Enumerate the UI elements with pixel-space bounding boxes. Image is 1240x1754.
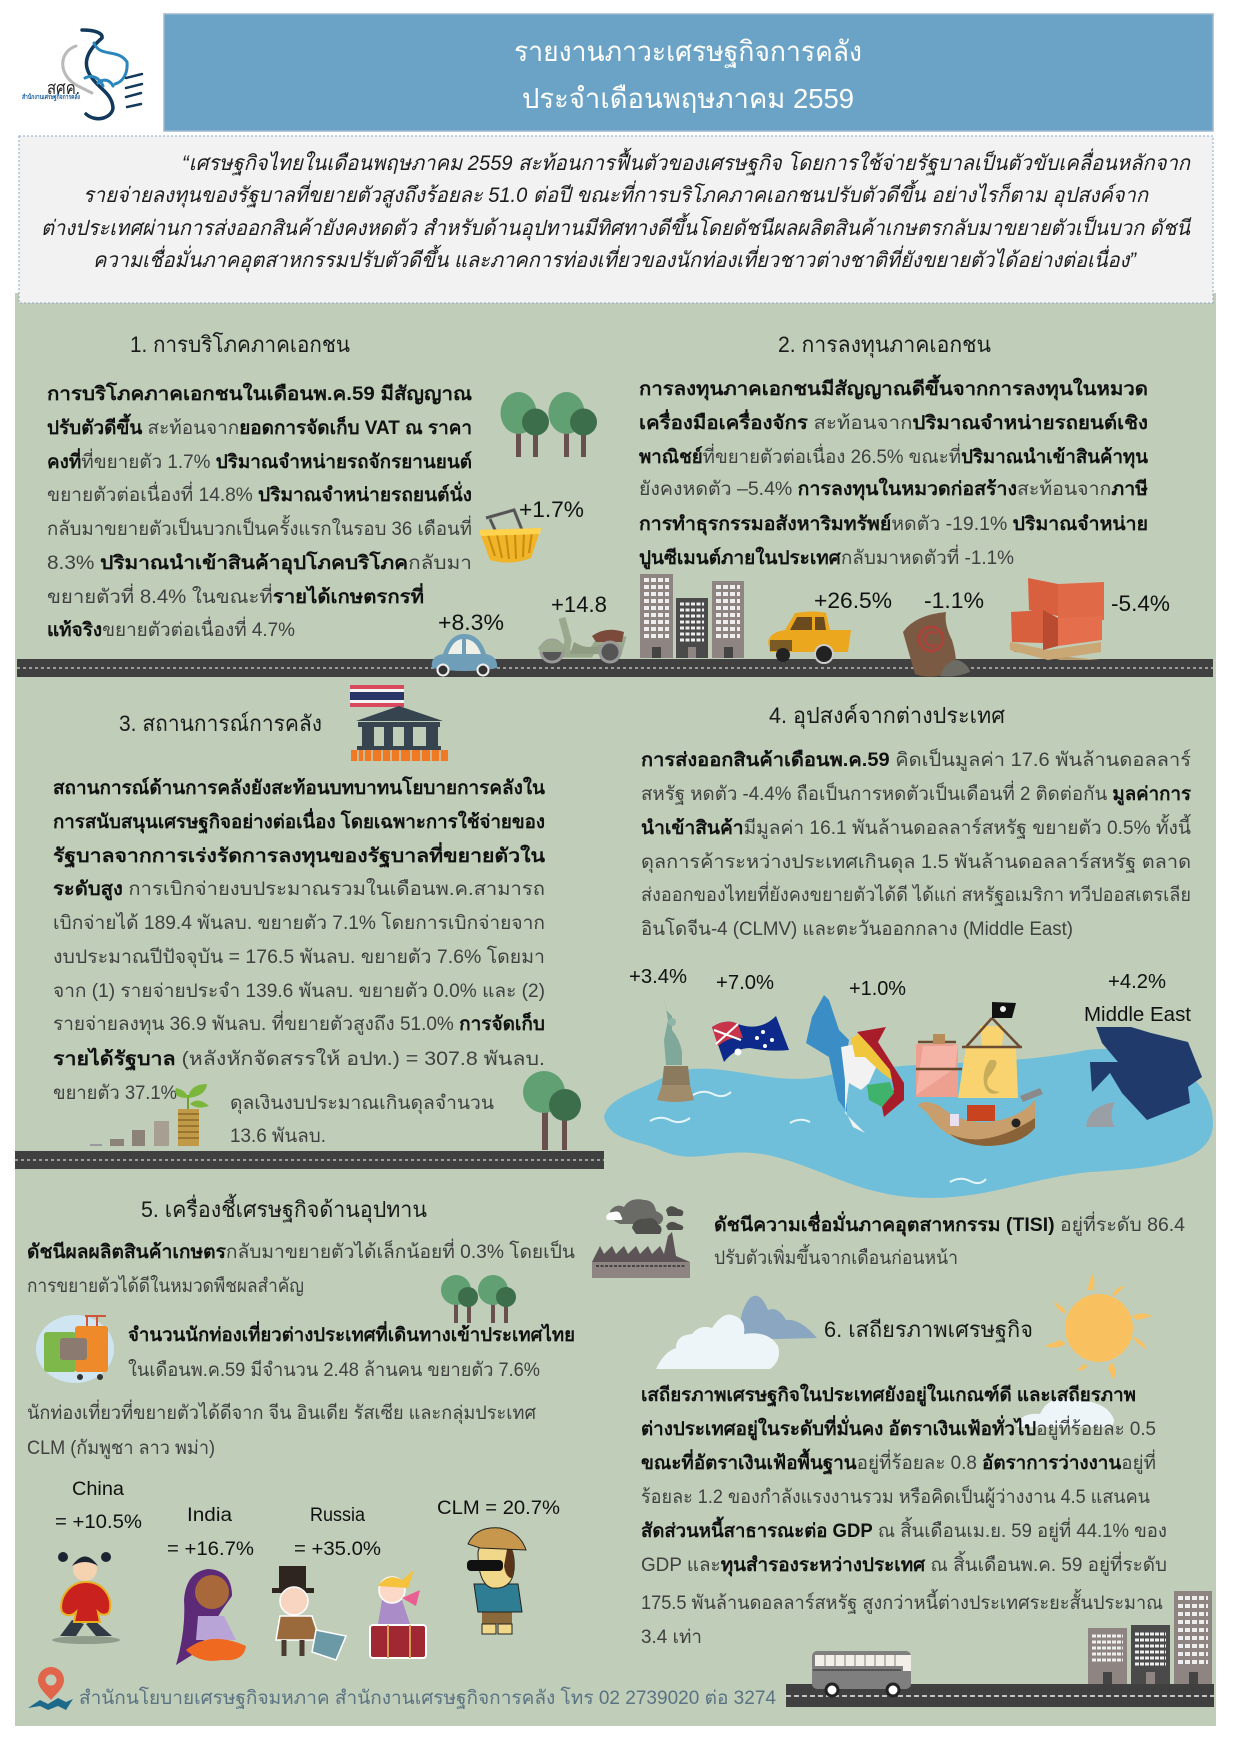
label: Middle East [1084, 1004, 1191, 1026]
section 5 text: tourists [27, 1321, 575, 1459]
icon: luggage [36, 1315, 114, 1383]
icon: trees [441, 1275, 516, 1323]
section 5 text: agriculture: ดัชนีผลผลิตสินค้าเกษตรกลับมาขยายตัวได้เล็กน้อยที่ 0.3% โดยเป็น [27, 1238, 575, 1263]
icon: buildings [640, 574, 744, 658]
icon: shopping basket [479, 510, 541, 563]
label: India [167, 1505, 254, 1560]
icon: clouds [656, 1296, 817, 1369]
section 2 text [639, 374, 1148, 570]
label: Russia: Russia [310, 1505, 365, 1526]
section 4 text: ส่งออกของไทยที่ยังคงขยายตัวได้ดี ได้แก่ สหรัฐอเมริกา ทวีปออสเตรเลีย [641, 881, 1191, 906]
icon: statue of liberty [657, 997, 694, 1102]
section 4 text: การส่งออกสินค้าเดือนพ.ค.59 คิดเป็นมูลค่า 17.6 พันล้านดอลลาร์ [641, 747, 1191, 771]
section 2 text: พาณิชย์ที่ขยายตัวต่อเนื่อง 26.5% ขณะที่ปริมาณนำเข้าสินค้าทุน [639, 443, 1148, 469]
budget balance text [230, 1093, 494, 1147]
section 3 text: จาก (1) รายจ่ายประจำ 139.6 พันลบ. ขยายตัว 0.0% และ (2) [53, 981, 545, 1002]
section 4 text: สหรัฐ หดตัว -4.4% ถือเป็นการหดตัวเป็นเดือนที่ 2 ติดต่อกัน มูลค่าการ [641, 780, 1192, 806]
label: +1.7% [519, 497, 584, 522]
section 6 text: ต่างประเทศอยู่ในระดับที่มั่นคง อัตราเงินเฟ้อทั่วไปอยู่ที่ร้อยละ 0.5 [641, 1415, 1156, 1441]
label: India: India [187, 1505, 232, 1526]
section: TISI text [714, 1211, 1185, 1269]
icon: location pin and map [28, 1667, 73, 1710]
section 2 text: เครื่องมือเครื่องจักร สะท้อนจาก ปริมาณจำหน่ายรถยนต์เชิง [639, 409, 1148, 434]
label: -5.4% [1111, 591, 1170, 616]
road: bottom [786, 1684, 1214, 1707]
label: India: = +16.7% [167, 1539, 254, 1560]
section 1 text: ขยายตัวที่ 8.4% ในขณะที่ รายได้เกษตรกรที่ [47, 583, 424, 608]
section: TISI text: ปรับตัวเพิ่มขึ้นจากเดือนก่อนหน้า [714, 1244, 958, 1269]
section 6 text [641, 1383, 1167, 1648]
icon: Russian boy [272, 1566, 346, 1660]
label: China: = +10.5% [55, 1512, 142, 1533]
section 3 text [53, 776, 545, 1104]
section 2 text: ยังคงหดตัว –5.4% การลงทุนในหมวดก่อสร้าง สะท้อนจากภาษี [639, 477, 1148, 501]
icon: CLM tourist [467, 1528, 526, 1634]
section 1 text: คงที่ที่ขยายตัว 1.7% ปริมาณจำหน่ายรถจักรยานยนต์ [47, 448, 472, 473]
road: top [17, 659, 1213, 677]
section 4 text: ดุลการค้าระหว่างประเทศเกินดุล 1.5 พันล้านดอลลาร์สหรัฐ ตลาด [641, 851, 1191, 874]
section 6 text: 175.5 พันล้านดอลลาร์สหรัฐ สูงกว่าหนี้ต่างประเทศระยะสั้นประมาณ [641, 1589, 1163, 1614]
title [514, 36, 862, 114]
section 1 text: การบริโภคภาคเอกชนในเดือนพ.ค.59 มีสัญญาณ [47, 382, 472, 405]
logo: สำนักงานเศรษฐกิจการคลัง [22, 93, 80, 102]
icon: Russian girl [370, 1570, 426, 1658]
icon: trees [500, 392, 597, 457]
section 5 text: tourists: CLM (กัมพูชา ลาว พม่า) [27, 1438, 215, 1459]
label: +14.8 [551, 592, 607, 617]
section 5 text: tourists: ในเดือนพ.ค.59 มีจำนวน 2.48 ล้านคน ขยายตัว 7.6% [128, 1359, 540, 1381]
section 4 text: อินโดจีน-4 (CLMV) และตะวันออกกลาง (Middle East) [641, 917, 1073, 940]
section 2 heading: 2. การลงทุนภาคเอกชน [778, 332, 991, 358]
section 1 text: ปรับตัวดีขึ้น สะท้อนจากยอดการจัดเก็บ VAT ณ ราคา [47, 413, 472, 439]
section 3 text: ระดับสูง การเบิกจ่ายงบประมาณรวมในเดือนพ.ค.สามารถ [53, 878, 545, 901]
section 6 text: ขณะที่อัตราเงินเฟ้อพื้นฐานอยู่ที่ร้อยละ 0.8 อัตราการว่างงานอยู่ที่ [641, 1448, 1156, 1476]
section 1 heading: 1. การบริโภคภาคเอกชน [130, 332, 350, 357]
section 2 text: การลงทุนภาคเอกชนมีสัญญาณดีขึ้นจากการลงทุนในหมวด [639, 374, 1148, 401]
label: CLM: CLM = 20.7% [437, 1498, 560, 1519]
section 6 text: GDP และทุนสำรองระหว่างประเทศ ณ สิ้นเดือนพ.ค. 59 อยู่ที่ระดับ [641, 1551, 1167, 1577]
quote box: ต่างประเทศผ่านการส่งออกสินค้ายังคงหดตัว สำหรับด้านอุปทานมีทิศทางดีขึ้นโดยดัชนีผลผลิตสินค้าเกษตรกลับมาขยายตัวเป็นบวก ดัชนี [41, 212, 1192, 241]
label: +7.0% [716, 972, 774, 994]
footer contact: สำนักนโยบายเศรษฐกิจมหภาค สำนักงานเศรษฐกิจการคลัง โทร 02 2739020 ต่อ 3274 [79, 1686, 776, 1709]
icon: blue car [432, 634, 497, 676]
label: China [55, 1479, 142, 1533]
icon: bank building [351, 706, 448, 761]
sea [604, 1049, 1213, 1198]
label: -1.1% [924, 588, 984, 613]
icon: Chinese girl [52, 1552, 120, 1644]
section 4 text: นำเข้าสินค้ามีมูลค่า 16.1 พันล้านดอลลาร์สหรัฐ ขยายตัว 0.5% ทั้งนี้ [641, 814, 1191, 839]
budget balance text: ดุลเงินงบประมาณเกินดุลจำนวน [230, 1093, 494, 1115]
icon: Thai flag [350, 685, 404, 707]
section 1 text: กลับมาขยายตัวเป็นบวกเป็นครั้งแรกในรอบ 36 เดือนที่ [47, 515, 472, 540]
label: +8.3% [438, 610, 504, 635]
title: ประจำเดือนพฤษภาคม 2559 [522, 83, 854, 114]
section 1 text [47, 382, 472, 641]
section 5 heading: 5. เครื่องชี้เศรษฐกิจด้านอุปทาน [141, 1194, 427, 1223]
icon: shark fin [1086, 1102, 1115, 1127]
section 6 text: 3.4 เท่า [641, 1627, 702, 1648]
logo: สศค. [47, 78, 80, 98]
section 2 text: ปูนซีเมนต์ภายในประเทศกลับมาหดตัวที่ -1.1% [639, 544, 1014, 570]
logo [22, 30, 142, 119]
label: Russia [294, 1505, 381, 1560]
section 5 text: tourists: จำนวนนักท่องเที่ยวต่างประเทศที่เดินทางเข้าประเทศไทย [128, 1321, 575, 1346]
quote box [19, 136, 1213, 303]
section 5 text: agriculture [27, 1238, 575, 1297]
icon: Indian woman [176, 1569, 246, 1665]
icon: coins and plant [90, 1084, 209, 1146]
section: TISI text: ดัชนีความเชื่อมั่นภาคอุตสาหกรรม (TISI) อยู่ที่ระดับ 86.4 [714, 1211, 1185, 1237]
decorative white cloud [1017, 1398, 1114, 1427]
section 3 text: ขยายตัว 37.1% [53, 1083, 177, 1104]
section 3 text: รัฐบาลจากการเร่งรัดการลงทุนของรัฐบาลที่ขยายตัวใน [53, 842, 545, 869]
section 5 text: agriculture: การขยายตัวได้ดีในหมวดพืชผลสำคัญ [27, 1275, 304, 1297]
section 3 text: รายจ่ายลงทุน 36.9 พันลบ. ที่ขยายตัวสูงถึง 51.0% การจัดเก็บ [53, 1010, 545, 1036]
section 3 text: รายได้รัฐบาล (หลังหักจัดสรรให้ อปท.) = 307.8 พันลบ. [53, 1047, 545, 1072]
icon: boxes on pallet [1009, 578, 1104, 660]
section 1 text: แท้จริงขยายตัวต่อเนื่องที่ 4.7% [47, 616, 295, 641]
section 3 text: เบิกจ่ายได้ 189.4 พันลบ. ขยายตัว 7.1% โดยการเบิกจ่ายจาก [53, 911, 545, 934]
label: +4.2% [1108, 971, 1166, 993]
header banner [164, 14, 1213, 131]
budget balance text: 13.6 พันลบ. [230, 1126, 326, 1147]
label: +3.4% [629, 966, 687, 988]
icon: scooter [538, 618, 624, 662]
label: +26.5% [814, 588, 892, 613]
section 6 heading: 6. เสถียรภาพเศรษฐกิจ [824, 1317, 1033, 1343]
section 3 heading: 3. สถานการณ์การคลัง [119, 711, 322, 736]
panel: green background [15, 293, 1216, 1726]
section 6 text: เสถียรภาพเศรษฐกิจในประเทศยังอยู่ในเกณฑ์ดี และเสถียรภาพ [641, 1383, 1136, 1408]
label: Russia: = +35.0% [294, 1539, 381, 1560]
section 6 text: ร้อยละ 1.2 ของกำลังแรงงานรวม หรือคิดเป็นผู้ว่างงาน 4.5 แสนคน [641, 1484, 1150, 1508]
section 1 text: 8.3% ปริมาณนำเข้าสินค้าอุปโภคบริโภค กลับมา [47, 551, 472, 575]
icon: factory and clouds [592, 1199, 690, 1278]
icon: cement bag [903, 612, 970, 677]
section 4 text [641, 747, 1192, 940]
section 1 text: ขยายตัวต่อเนื่องที่ 14.8% ปริมาณจำหน่ายรถยนต์นั่ง [47, 481, 472, 506]
section 3 text: งบประมาณปีปัจจุบัน = 176.5 พันลบ. ขยายตัว 7.6% โดยมา [53, 945, 545, 969]
quote box: ความเชื่อมั่นภาคอุตสาหกรรมปรับตัวดีขึ้น และภาคการท่องเที่ยวของนักท่องเที่ยวชาวต่างชาติที่ยังขยายตัวได้อย่างต่อเนื่อง” [93, 244, 1137, 273]
icon: tree [523, 1071, 581, 1150]
section 6 text: สัดส่วนหนี้สาธารณะต่อ GDP ณ สิ้นเดือนเม.ย. 59 อยู่ที่ 44.1% ของ [641, 1516, 1167, 1542]
section 4 heading: 4. อุปสงค์จากต่างประเทศ [769, 703, 1005, 729]
map: CLMV [806, 995, 904, 1133]
wave marks [650, 1092, 986, 1183]
road: middle [15, 1151, 604, 1169]
icon: bus [812, 1651, 911, 1696]
icon: buildings [1088, 1591, 1212, 1684]
title: รายงานภาวะเศรษฐกิจการคลัง [514, 36, 862, 68]
map: Middle East [1090, 1027, 1202, 1120]
icon: yellow truck [768, 612, 851, 663]
section 3 text: สถานการณ์ด้านการคลังยังสะท้อนบทบาทนโยบายการคลังใน [53, 776, 545, 799]
icon: sun [1044, 1274, 1152, 1380]
icon: pirate ship [916, 1002, 1043, 1146]
quote box: “เศรษฐกิจไทยในเดือนพฤษภาคม 2559 สะท้อนการฟื้นตัวของเศรษฐกิจ โดยการใช้จ่ายรัฐบาลเป็นตัวขับเคลื่อนหลักจาก [182, 147, 1191, 176]
quote box: รายจ่ายลงทุนของรัฐบาลที่ขยายตัวสูงถึงร้อยละ 51.0 ต่อปี ขณะที่การบริโภคภาคเอกชนปรับตัวดีขึ้น อย่างไรก็ตาม อุปสงค์จาก [83, 179, 1149, 208]
section 3 text: การสนับสนุนเศรษฐกิจอย่างต่อเนื่อง โดยเฉพาะการใช้จ่ายของ [53, 808, 545, 835]
section 5 text: tourists: นักท่องเที่ยวที่ขยายตัวได้ดีจาก จีน อินเดีย รัสเซีย และกลุ่มประเทศ [27, 1399, 536, 1425]
section 2 text: การทำธุรกรรมอสังหาริมทรัพย์ หดตัว -19.1% ปริมาณจำหน่าย [639, 513, 1148, 536]
icon: Australian flag [712, 1016, 789, 1062]
label: +1.0% [849, 978, 906, 1000]
label: China: China [72, 1479, 124, 1500]
